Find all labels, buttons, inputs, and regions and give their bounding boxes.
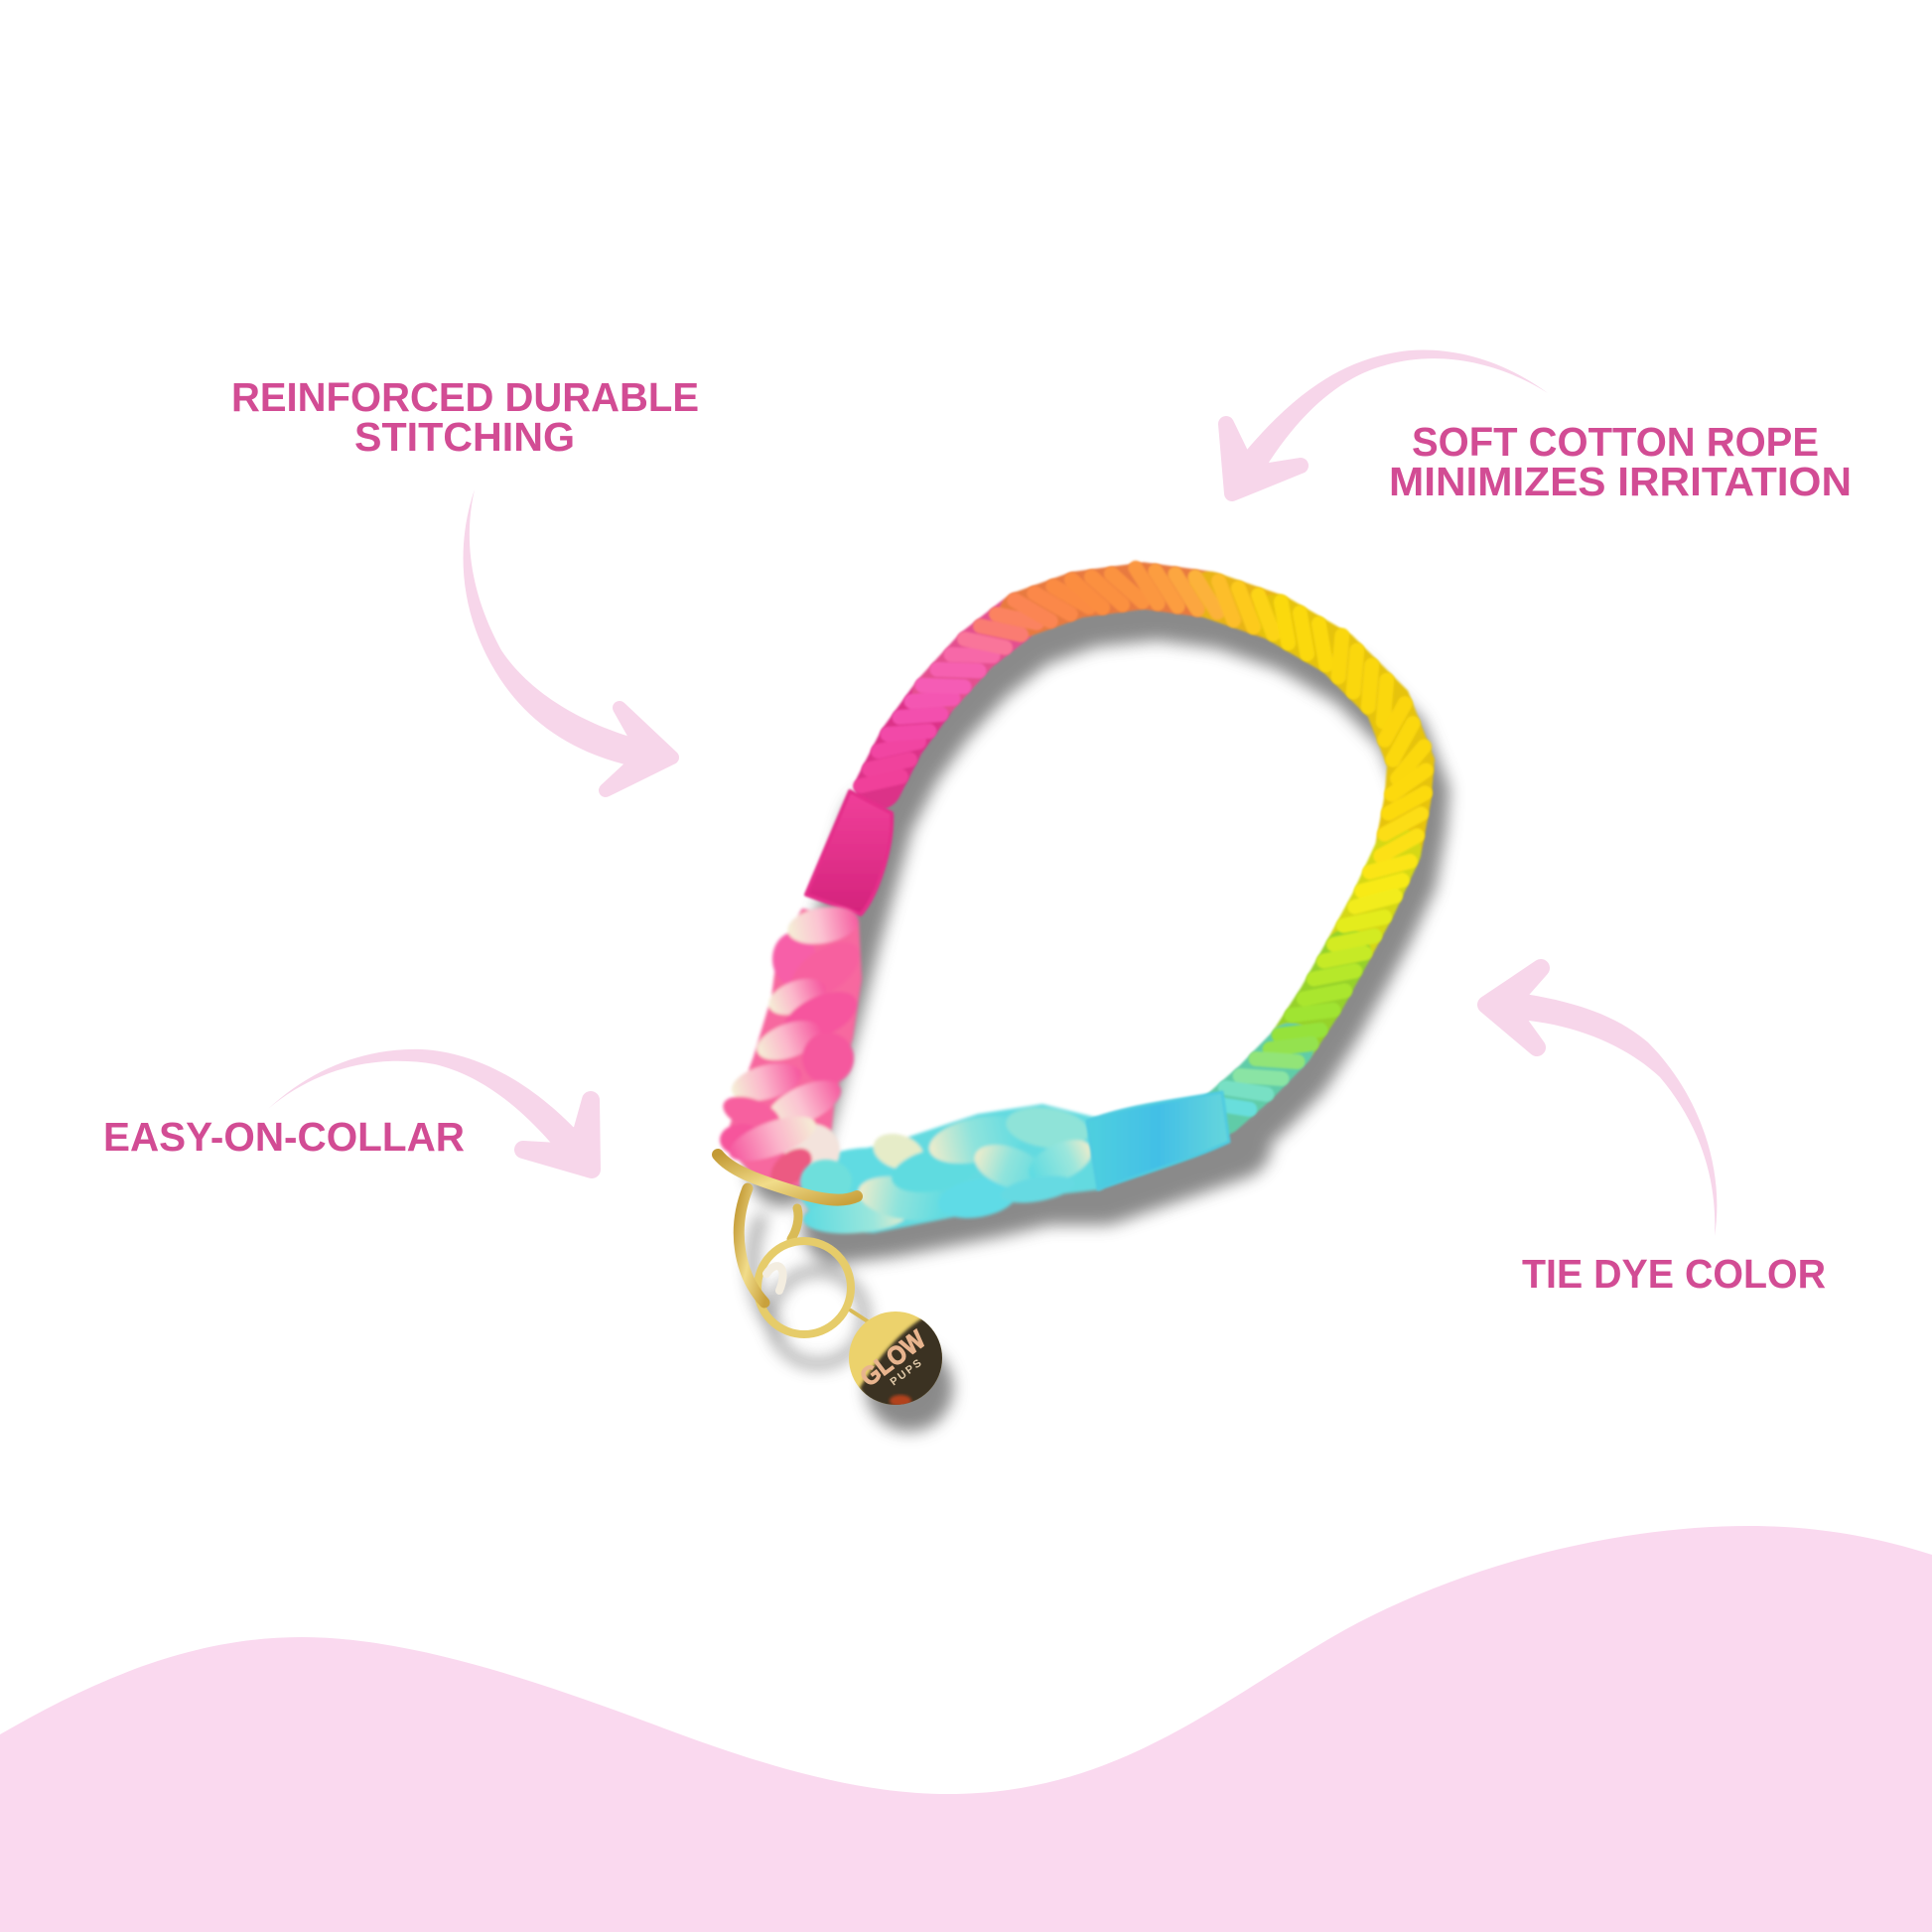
label: tie dye color: TIE DYE COLOR	[1522, 1251, 1826, 1297]
lower teal strand end	[800, 1160, 852, 1203]
logo tag: GLOW	[854, 1324, 931, 1392]
rope twisted strands	[861, 568, 1426, 1109]
pink braid	[719, 901, 870, 1194]
label: soft cotton rope	[1389, 419, 1852, 504]
label: soft cotton rope: MINIMIZES IRRITATION	[1389, 459, 1852, 504]
collar shadow	[753, 616, 1425, 1432]
gold hardware	[718, 1155, 871, 1334]
label: reinforced durable stitching	[231, 374, 699, 460]
background wave	[0, 1526, 1932, 1932]
pink thread wrap	[806, 791, 892, 914]
teal thread wrap	[1087, 1092, 1229, 1189]
label: reinforced durable stitching: REINFORCED DURABLE	[231, 374, 699, 420]
logo tag: PUPS	[889, 1357, 924, 1388]
rope body	[879, 586, 1411, 1112]
arrow: to ring	[268, 1049, 592, 1170]
arrow: to color	[1486, 968, 1717, 1236]
label: soft cotton rope: SOFT COTTON ROPE	[1412, 419, 1819, 465]
logo tag	[849, 1311, 942, 1405]
arrow: to rope	[1226, 349, 1548, 493]
label: reinforced durable stitching: STITCHING	[354, 414, 575, 460]
teal braid	[799, 1102, 1102, 1238]
arrow: to stitching	[464, 489, 672, 790]
collar product illustration	[718, 568, 1426, 1432]
label: easy-on-collar: EASY-ON-COLLAR	[103, 1114, 465, 1160]
